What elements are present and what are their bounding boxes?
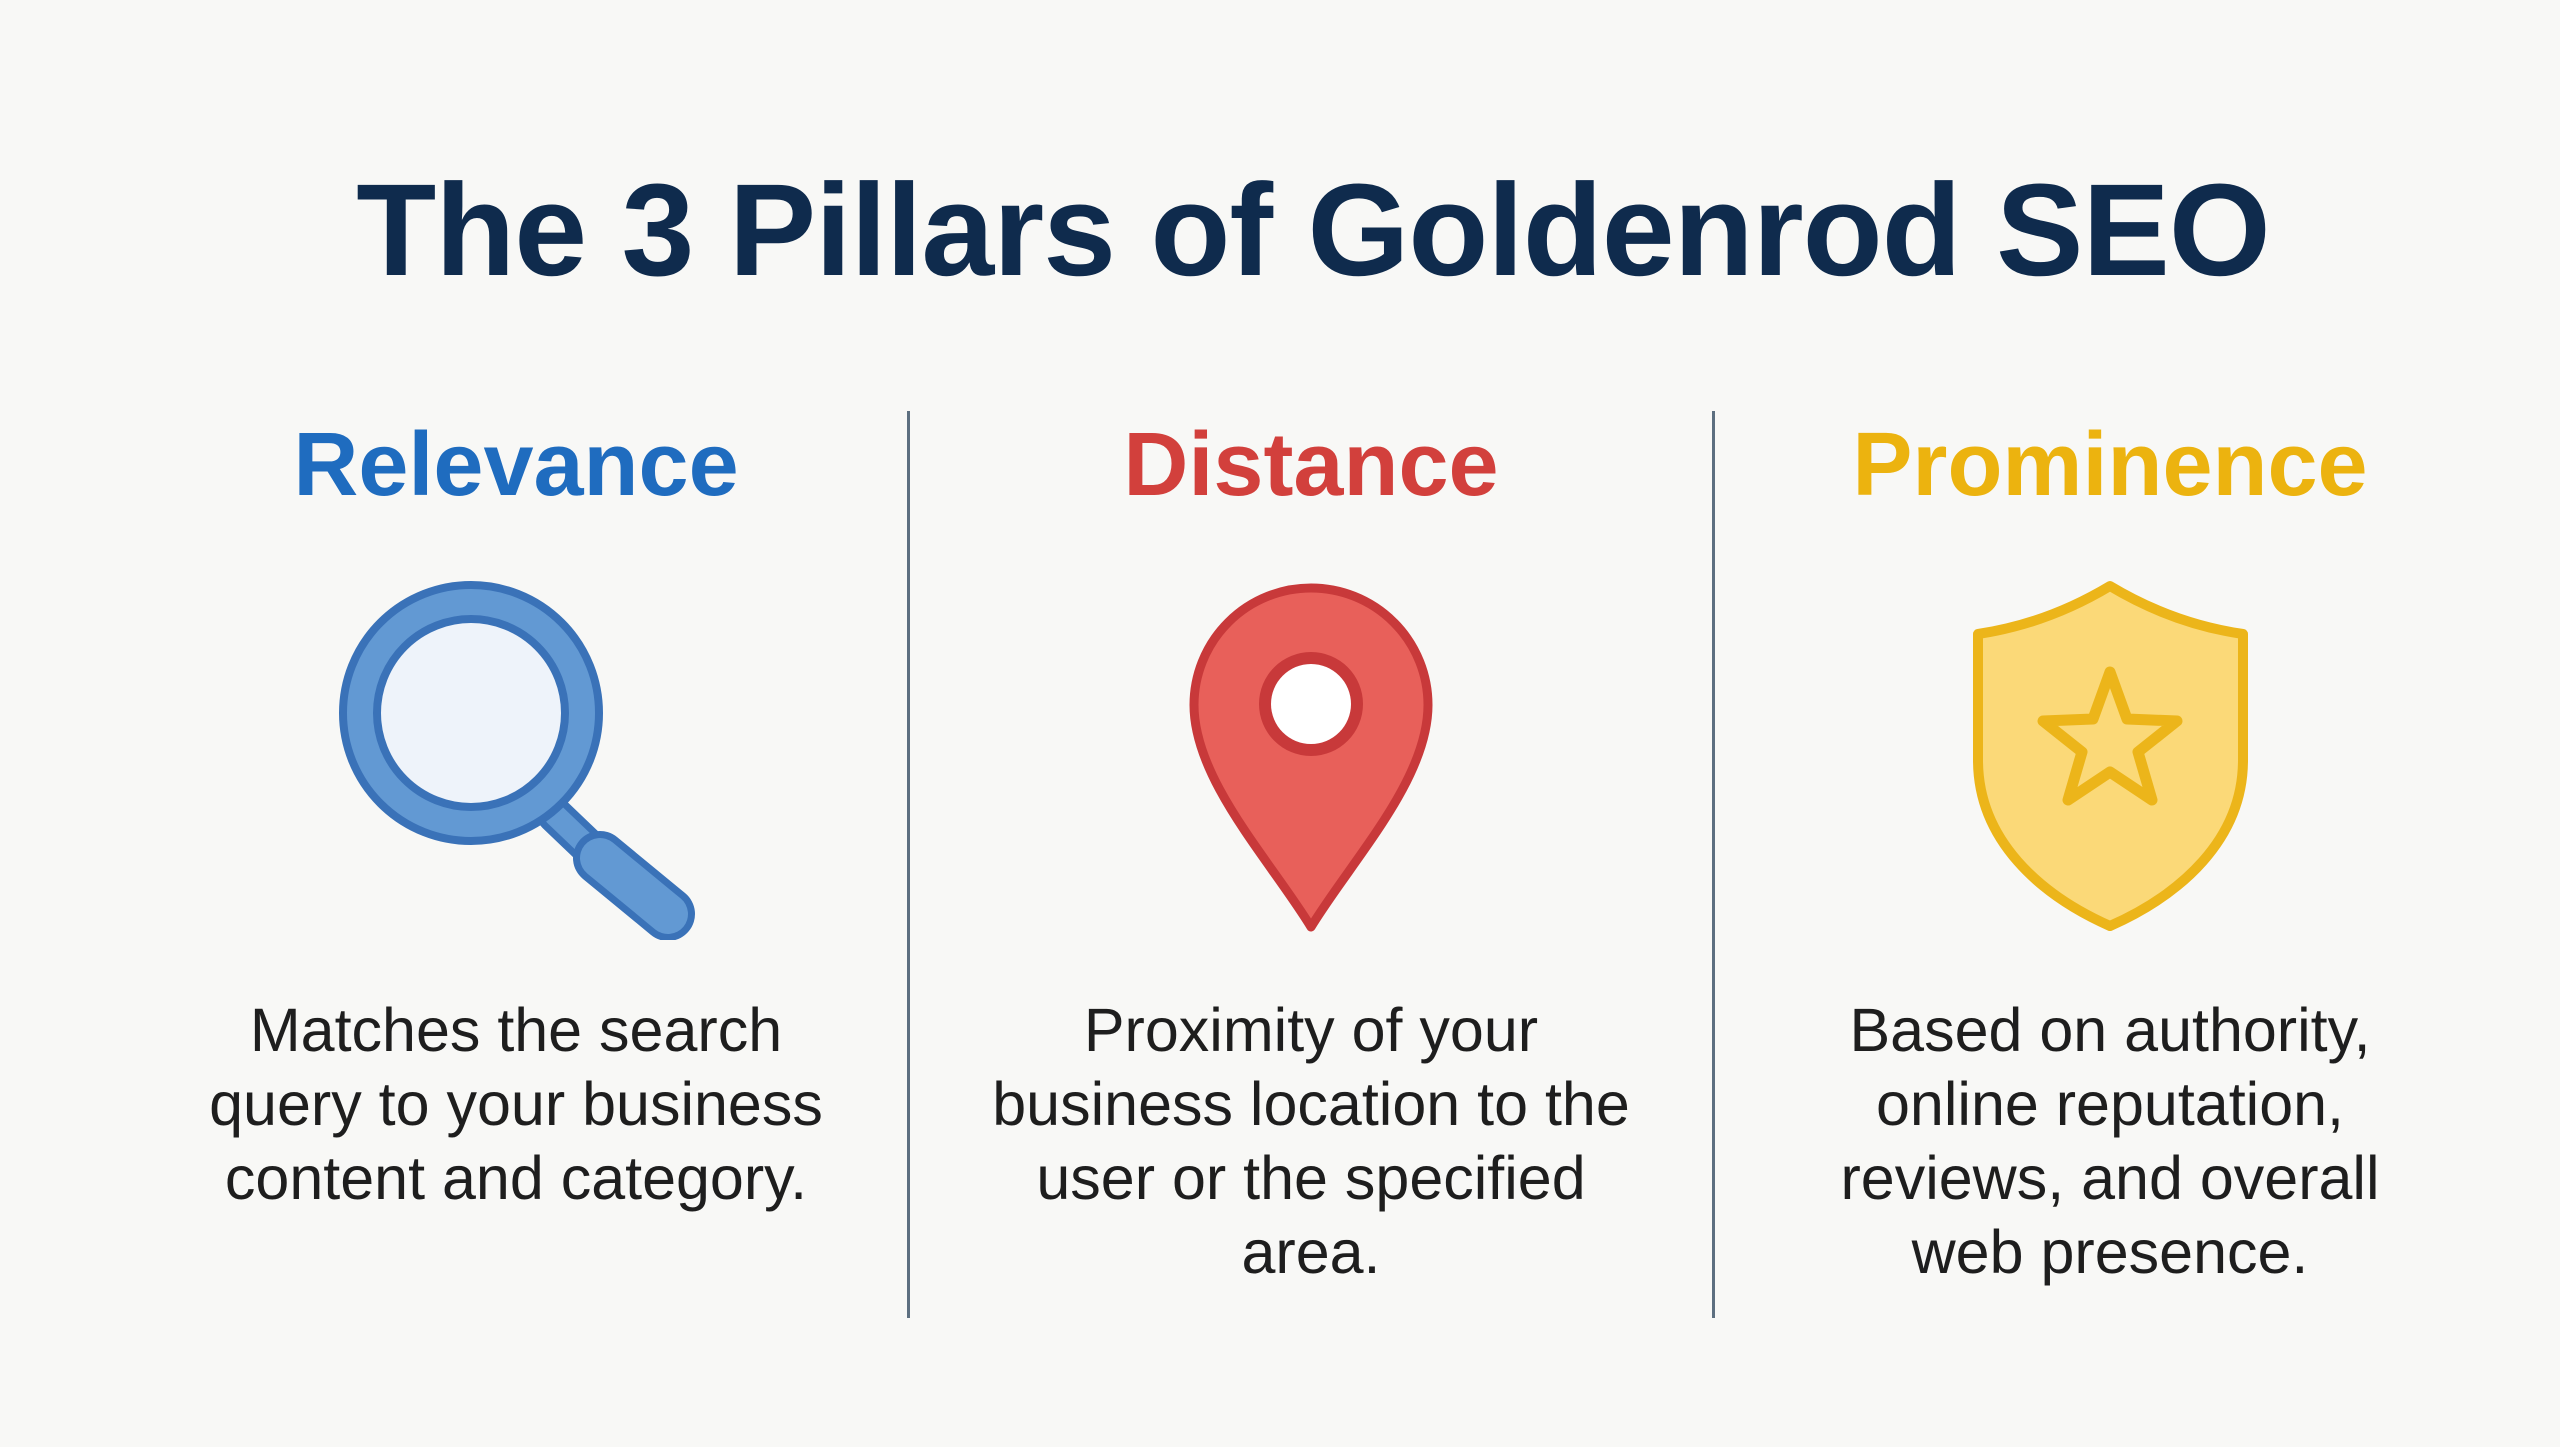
text: distance description: area. (1241, 1218, 1381, 1286)
text: distance description: Proximity of your (1084, 996, 1538, 1064)
text: distance description: user or the specified (1036, 1144, 1586, 1212)
text: prominence description: reviews, and overall (1840, 1144, 2380, 1212)
text: relevance description: Matches the search (250, 996, 782, 1064)
text: prominence description (1840, 996, 2380, 1286)
text: distance description: business location to the (992, 1070, 1630, 1138)
heading: Relevance: Relevance (293, 415, 739, 515)
title: The 3 Pillars of Goldenrod SEO (356, 156, 2270, 303)
heading: Distance: Distance (1123, 415, 1499, 515)
icon: magnifying glass (339, 581, 695, 940)
text: prominence description: Based on authority, (1849, 996, 2371, 1064)
text: relevance description: content and category. (225, 1144, 807, 1212)
text: relevance description: query to your business (209, 1070, 823, 1138)
heading: Prominence: Prominence (1852, 415, 2368, 515)
text: relevance description (209, 996, 823, 1212)
text: prominence description: web presence. (1912, 1218, 2308, 1286)
icon: shield with star (1973, 581, 2248, 931)
icon: location pin (1190, 584, 1432, 932)
text: prominence description: online reputation, (1876, 1070, 2344, 1138)
text: distance description (992, 996, 1630, 1286)
